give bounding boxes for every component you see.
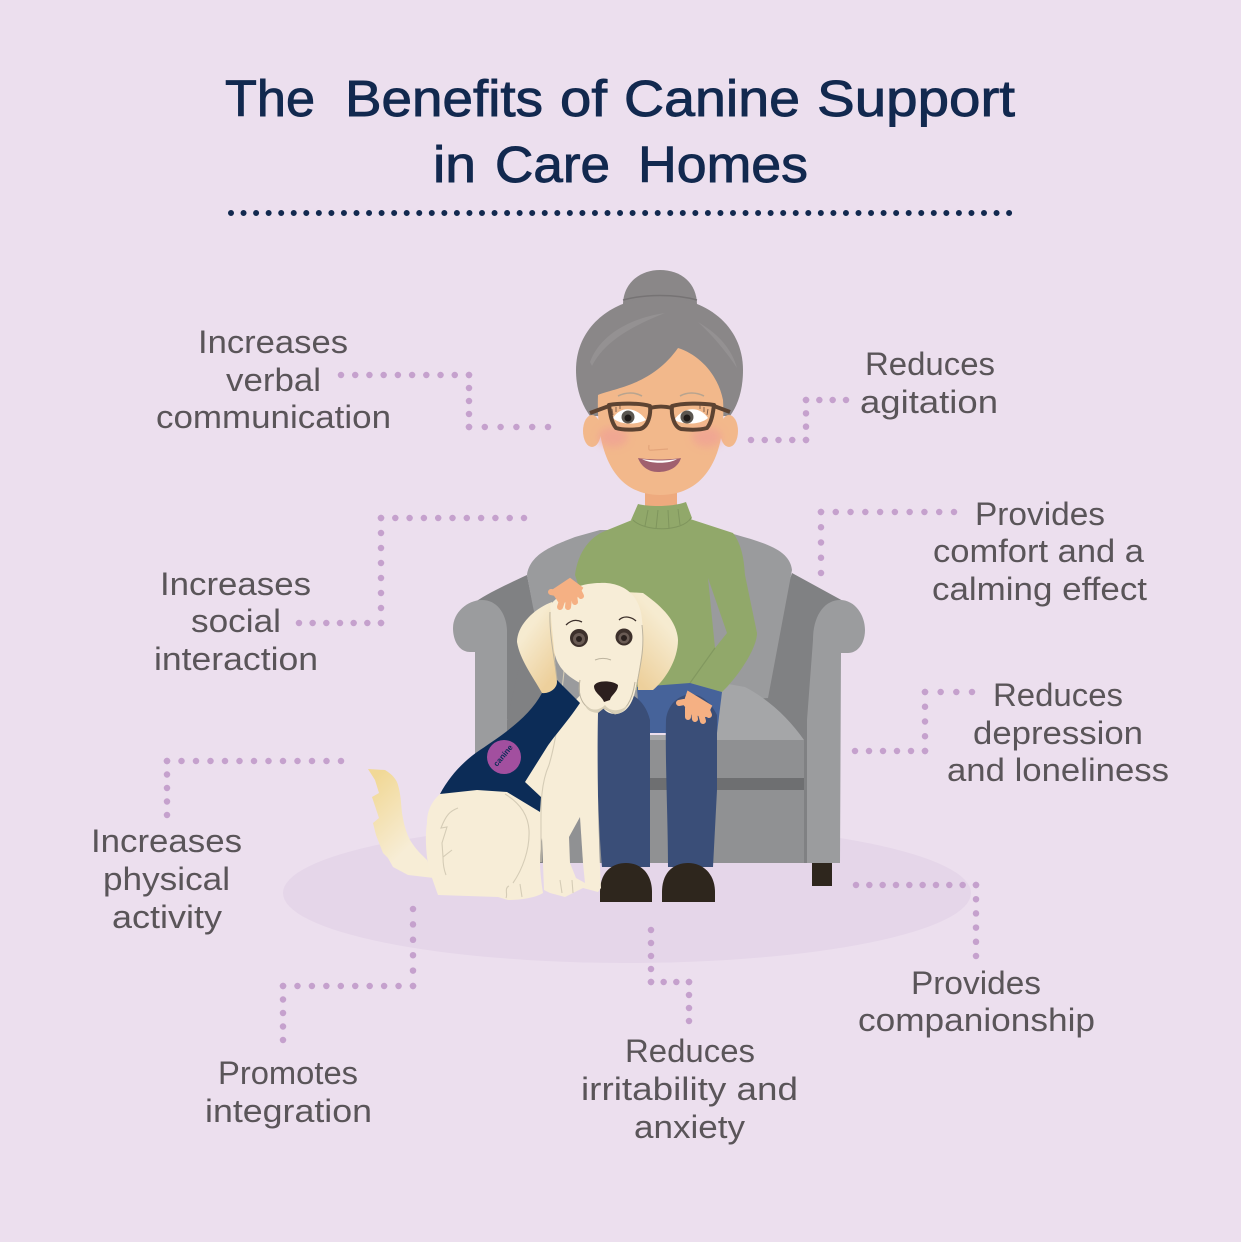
hair bun xyxy=(623,270,697,305)
shoes xyxy=(600,863,652,902)
title: Benefits xyxy=(345,70,543,127)
title xyxy=(225,70,1015,193)
head xyxy=(576,270,743,495)
label: promotes integration: Promotes xyxy=(218,1055,358,1091)
back hair xyxy=(576,297,743,416)
badge: canine xyxy=(492,743,515,768)
label: reduces irritability and anxiety: anxiety xyxy=(634,1109,745,1145)
body fur lines xyxy=(441,610,573,898)
dog nose xyxy=(594,681,618,702)
title: Canine xyxy=(624,70,800,127)
gap between front legs xyxy=(569,817,583,863)
ears xyxy=(583,415,601,447)
cheeks xyxy=(598,427,628,447)
floor ellipse xyxy=(283,823,971,963)
label: provides comfort and a calming effect: calming effect xyxy=(932,571,1147,607)
title: in xyxy=(433,136,476,193)
head xyxy=(550,583,643,714)
hand on dog's head xyxy=(551,579,582,607)
label: provides comfort and a calming effect: Provides xyxy=(975,496,1105,532)
label: increases social interaction: Increases xyxy=(160,566,311,602)
eyes xyxy=(613,409,708,424)
label: reduces depression and loneliness: depression xyxy=(973,715,1143,751)
floor gaps between legs xyxy=(530,872,552,895)
title: Support xyxy=(817,70,1015,127)
label: provides companionship: Provides xyxy=(911,965,1041,1001)
eyelashes xyxy=(612,405,708,415)
label: promotes integration: integration xyxy=(205,1093,372,1129)
connector: depression xyxy=(855,692,972,751)
ears xyxy=(517,602,557,693)
connector: comfort xyxy=(821,512,954,573)
muzzle shadow xyxy=(585,705,628,714)
label: increases verbal communication: communication xyxy=(156,399,391,435)
label: reduces irritability and anxiety xyxy=(581,1033,798,1145)
label: reduces depression and loneliness xyxy=(947,677,1169,788)
mouth xyxy=(638,458,681,472)
connector: companionship xyxy=(856,885,976,956)
label: increases social interaction: interaction xyxy=(154,641,318,677)
label: provides comfort and a calming effect: comfort and a xyxy=(933,533,1144,569)
label: reduces irritability and anxiety: irritability and xyxy=(581,1071,798,1107)
glasses xyxy=(590,404,730,430)
connector: social interaction xyxy=(299,518,524,623)
label: reduces agitation xyxy=(860,346,998,420)
body xyxy=(426,690,601,900)
jeans xyxy=(597,683,722,867)
label: reduces irritability and anxiety: Reduces xyxy=(625,1033,755,1069)
label: increases physical activity: Increases xyxy=(91,823,242,859)
fringe highlight xyxy=(590,313,737,368)
eyebrows and nose xyxy=(618,393,704,396)
connector: integration xyxy=(283,909,413,1040)
label: increases physical activity xyxy=(91,823,242,935)
title: Care xyxy=(495,136,610,193)
label: increases physical activity: activity xyxy=(112,899,222,935)
vest xyxy=(440,680,580,812)
sweater xyxy=(575,518,757,692)
label: reduces depression and loneliness: and loneliness xyxy=(947,752,1169,788)
label: increases social interaction: social xyxy=(191,603,281,639)
connector: physical activity xyxy=(167,761,341,815)
label: reduces agitation: Reduces xyxy=(865,346,995,382)
connector: verbal communication xyxy=(341,375,548,427)
tail xyxy=(368,769,434,878)
label: promotes integration xyxy=(205,1055,372,1129)
dog xyxy=(368,583,678,900)
neck and collar xyxy=(645,485,677,507)
label: increases verbal communication: Increases xyxy=(198,324,348,360)
label: provides companionship xyxy=(858,965,1095,1038)
connector: agitation xyxy=(751,400,846,440)
woman xyxy=(575,270,757,902)
label: reduces agitation: agitation xyxy=(860,384,998,420)
title: of xyxy=(560,70,608,127)
face xyxy=(598,348,723,495)
label: increases social interaction xyxy=(154,566,318,677)
label: increases verbal communication xyxy=(156,324,391,435)
label: increases verbal communication: verbal xyxy=(226,362,321,398)
label: increases physical activity: physical xyxy=(103,861,230,897)
dog eyes and brows xyxy=(570,629,588,647)
connector: irritability xyxy=(651,930,689,1021)
hand on knee xyxy=(679,692,711,721)
label: reduces depression and loneliness: Reduces xyxy=(993,677,1123,713)
title: Homes xyxy=(638,136,808,193)
armchair xyxy=(453,530,865,886)
label: provides companionship: companionship xyxy=(858,1002,1095,1038)
label: provides comfort and a calming effect xyxy=(932,496,1147,607)
title: The xyxy=(225,70,315,127)
